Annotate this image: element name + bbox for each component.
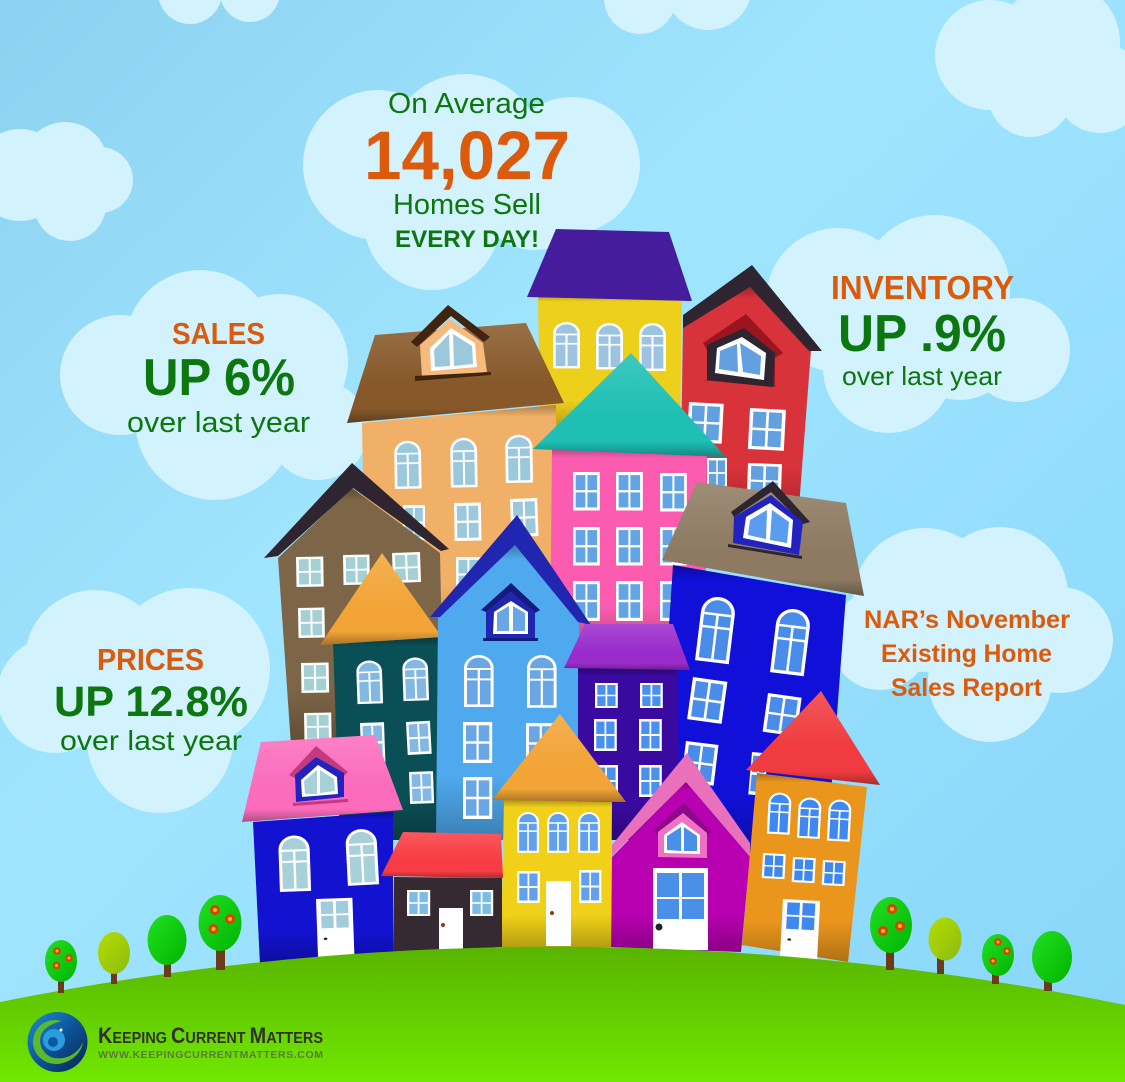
logo: company name: KEEPING CURRENT MATTERS <box>98 1023 323 1048</box>
tree: right 2 <box>928 918 962 974</box>
door <box>653 868 708 950</box>
house: front blue with pink roof <box>242 735 403 964</box>
door <box>439 908 463 950</box>
sales note: over last year <box>127 407 310 439</box>
roof <box>320 553 442 645</box>
prices label: PRICES <box>97 642 204 677</box>
headline block <box>364 88 570 253</box>
roof <box>430 515 591 625</box>
windows <box>687 402 786 499</box>
house: front yellow with orange roof <box>492 714 626 948</box>
house: brown with dark gable <box>264 463 449 745</box>
windows <box>407 890 493 916</box>
on average: On Average <box>388 88 545 120</box>
windows <box>394 435 539 592</box>
source line 1: NAR’s November <box>864 606 1070 634</box>
door <box>780 899 820 960</box>
source note <box>864 606 1070 702</box>
cloud: headline <box>303 74 640 290</box>
sales stat <box>127 316 310 439</box>
house: indigo with purple roof <box>564 624 690 840</box>
inventory stat <box>831 269 1014 391</box>
logo: website: WWW.KEEPINGCURRENTMATTERS.COM <box>98 1049 323 1061</box>
tree: left 3 <box>148 915 186 977</box>
every day: EVERY DAY! <box>395 226 539 253</box>
roof <box>347 323 564 423</box>
tree: right 4 <box>1032 931 1072 991</box>
cloud: top centre edge <box>604 0 752 34</box>
roof <box>612 753 750 857</box>
cloud: inventory <box>766 215 1070 433</box>
tree: right 1 with flowers <box>870 897 912 970</box>
windows <box>594 683 663 797</box>
prices value: UP 12.8% <box>54 678 248 726</box>
dormer <box>411 305 491 381</box>
roof <box>527 229 692 301</box>
house: pink with teal roof <box>533 353 726 650</box>
dormer <box>701 314 783 387</box>
dormer <box>728 481 810 559</box>
tree: right 3 with flowers <box>982 934 1014 984</box>
inventory value: UP .9% <box>838 305 1006 363</box>
door <box>546 881 571 946</box>
windows <box>296 552 421 741</box>
tree: left 2 <box>98 932 130 984</box>
windows <box>463 655 557 819</box>
house: orange with red roof <box>742 691 880 962</box>
inventory note: over last year <box>842 361 1002 391</box>
windows <box>573 472 687 621</box>
dormer <box>289 746 348 806</box>
cloud: top left edge <box>158 0 280 24</box>
roof <box>242 735 403 822</box>
prices stat <box>54 642 248 756</box>
cloud: prices <box>0 588 270 813</box>
house: tan with brown roof <box>347 305 564 640</box>
homes sell: Homes Sell <box>393 189 541 221</box>
roof <box>533 353 726 457</box>
sales value: UP 6% <box>143 349 295 407</box>
clouds <box>0 0 1125 813</box>
source line 3: Sales Report <box>891 674 1043 702</box>
trees <box>45 895 1072 993</box>
cloud: sales <box>60 270 368 500</box>
14,027 figure: 14,027 <box>364 117 570 194</box>
roof <box>381 832 503 878</box>
roof <box>746 691 880 785</box>
windows <box>681 595 812 796</box>
source line 2: Existing Home <box>881 640 1052 668</box>
windows <box>356 657 434 804</box>
sales label: SALES <box>172 316 265 351</box>
roof <box>662 482 864 596</box>
dormer <box>654 803 711 858</box>
house: sky blue with navy gable <box>430 515 591 840</box>
tree: left 4 with flowers <box>198 895 242 970</box>
tree: left 1 with flowers <box>45 940 77 993</box>
door <box>316 898 354 958</box>
windows <box>517 812 601 903</box>
house: dark teal with orange roof <box>320 553 446 840</box>
windows <box>762 792 852 886</box>
roof <box>564 624 690 670</box>
house: small dark with red roof <box>381 832 503 952</box>
roof <box>264 463 449 558</box>
roof <box>683 265 822 351</box>
house: yellow with purple roof <box>527 229 692 430</box>
dormer <box>481 583 540 641</box>
cloud: top right <box>935 0 1125 137</box>
house: big blue with taupe roof <box>662 481 864 860</box>
logo: swirl <box>28 1012 88 1072</box>
cloud: upper left <box>0 122 133 241</box>
windows <box>278 828 379 892</box>
roof <box>492 714 626 802</box>
windows <box>553 322 666 371</box>
house: magenta with pink roof <box>611 753 750 952</box>
inventory label: INVENTORY <box>831 269 1014 306</box>
house: red <box>680 265 822 520</box>
cloud: NAR report <box>830 527 1113 742</box>
prices note: over last year <box>60 725 242 756</box>
green hill <box>0 947 1125 1082</box>
